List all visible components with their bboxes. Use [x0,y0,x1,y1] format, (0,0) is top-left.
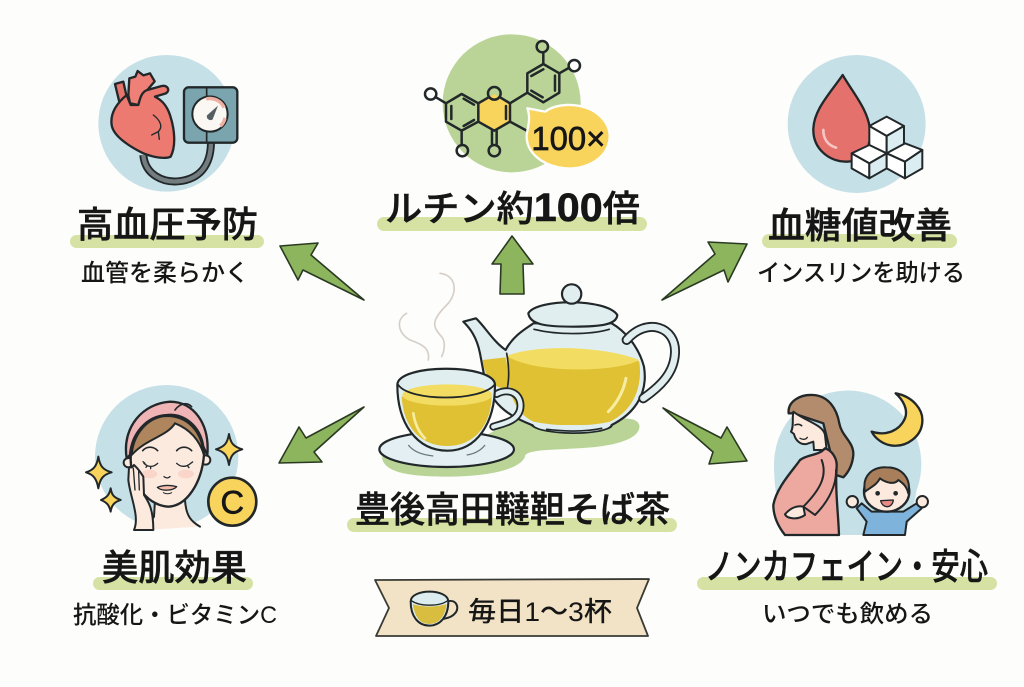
heading: ルチン約100倍: ルチン約100倍 [385,186,640,230]
icon: small tea cup [411,592,457,626]
panel: caffeine free [697,391,997,628]
subtext: いつでも飲める: いつでも飲める [762,601,933,628]
panel: skin benefit [73,385,277,629]
icon: teapot and tea cup [379,273,675,477]
panel: hypertension prevention [70,55,264,287]
panel: center tea illustration [347,273,677,532]
callout: 100x bubble [527,105,610,168]
text: 毎日1〜3杯: 毎日1〜3杯 [468,597,612,627]
heading: 豊後高田韃靼そば茶: 豊後高田韃靼そば茶 [355,489,670,530]
heading: 高血圧予防: 高血圧予防 [77,204,258,245]
icon: heart and blood pressure gauge [98,55,237,192]
subtext: 抗酸化・ビタミンC: 抗酸化・ビタミンC [73,602,277,629]
banner: daily amount [375,579,649,636]
panel: blood sugar improvement [757,55,965,287]
arrow: to caffeine free [663,408,747,464]
callout: 100x bubble: 100× [531,121,605,158]
icon: pregnant mother, child and moon [773,391,928,535]
heading: 血糖値改善: 血糖値改善 [768,205,952,246]
arrow: to blood sugar [662,242,747,300]
arrow: to hypertension [280,243,364,300]
icon: woman face with sparkles and vitamin C: C [221,483,244,520]
icon: rutin molecule with 100x bubble [425,34,610,172]
panel: rutin 100 times [377,34,647,231]
subtext: インスリンを助ける: インスリンを助ける [757,260,965,287]
heading: 美肌効果: 美肌効果 [102,547,247,588]
arrow: to rutin [492,236,533,294]
icon: woman face with sparkles and vitamin C [86,385,256,531]
arrow: to skin benefit [279,407,364,463]
icon: blood drop and sugar cubes [788,55,926,193]
subtext: 血管を柔らかく: 血管を柔らかく [81,260,249,287]
